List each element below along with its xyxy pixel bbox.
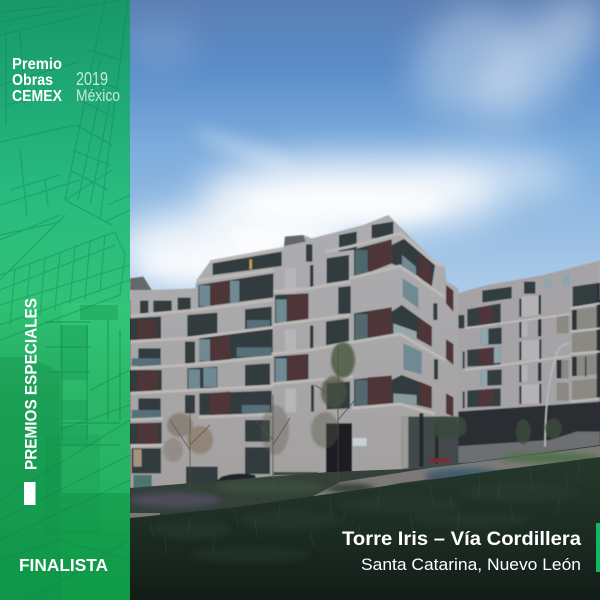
project title: Torre Iris – Vía Cordillera [342, 528, 581, 550]
white marker block [24, 482, 36, 505]
glass panels [132, 250, 422, 418]
foreground vegetation [130, 457, 600, 600]
heading: Premio Obras CEMEX: Obras [12, 72, 53, 89]
green accent bar [596, 523, 600, 572]
year and country: 2019 [76, 69, 108, 89]
project location: Santa Catarina, Nuevo León [361, 555, 581, 574]
heading: Premio Obras CEMEX: Premio [12, 56, 62, 73]
panel: green sidebar [0, 0, 130, 600]
ghost building overlay [0, 303, 130, 600]
low hedge [273, 468, 458, 477]
photo: buildings [130, 215, 600, 497]
building: main tower [130, 215, 458, 497]
sketch line overlay [0, 0, 130, 600]
year and country [76, 69, 120, 105]
year and country: México [76, 87, 120, 105]
building: rear right block [448, 261, 600, 463]
maroon panels [137, 239, 453, 443]
trees [163, 342, 460, 490]
ground, road and car blur [130, 445, 600, 520]
category label: Premios Especiales: PREMIOS ESPECIALES [22, 298, 40, 470]
parked car [212, 474, 257, 485]
heading: Premio Obras CEMEX: CEMEX [12, 88, 62, 105]
tower facade [130, 215, 458, 497]
light louvres [285, 268, 296, 412]
heading: Premio Obras CEMEX [12, 56, 62, 105]
floor slabs [130, 233, 445, 446]
sky background with clouds [115, 0, 600, 300]
finalist label: FINALISTA [19, 555, 108, 575]
dark window blocks [130, 222, 438, 487]
columns [419, 413, 438, 467]
